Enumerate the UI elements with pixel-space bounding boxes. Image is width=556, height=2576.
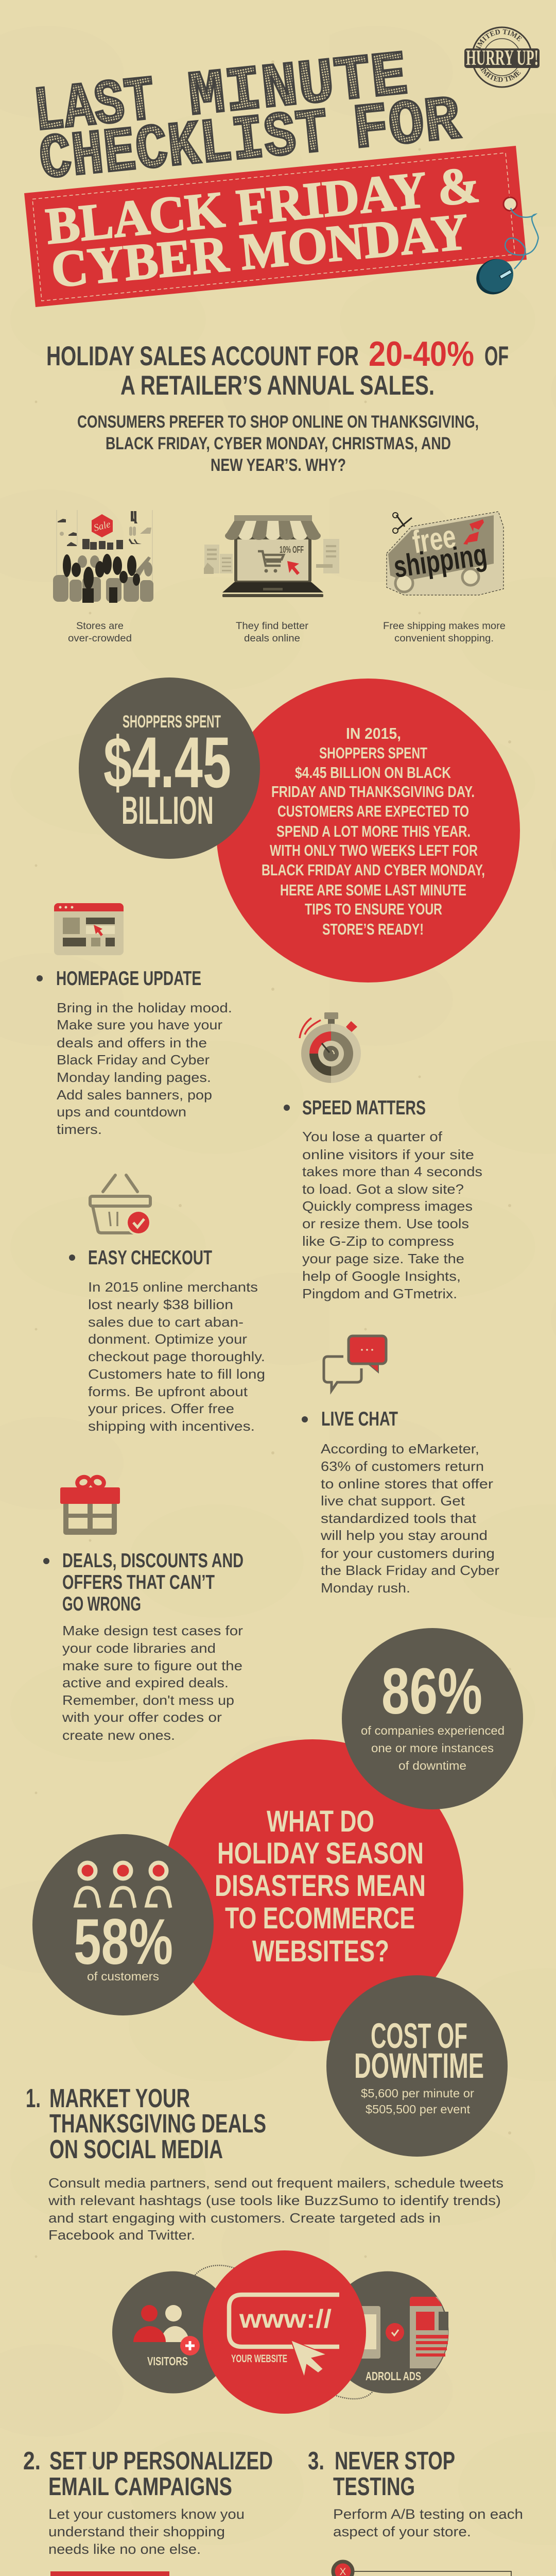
red circle: in 2015: $4.45 BILLION ON BLACK	[295, 764, 451, 782]
heading 2: set up personalized email campaigns	[23, 2447, 273, 2501]
heading 2: set up personalized email campaigns: 2.	[23, 2447, 41, 2475]
captions: why shop online	[68, 621, 506, 644]
red circle: holiday season disasters: TO ECOMMERCE	[225, 1902, 415, 1935]
section: speed matters: to load. Got a slow site?	[302, 1181, 464, 1197]
icon: gift	[60, 1475, 120, 1535]
icon: online store on laptop: 10% OFF	[280, 545, 304, 555]
stamp: hurry up: LIMITED TIME	[480, 68, 521, 82]
section: live chat: standardized tools that	[321, 1511, 477, 1526]
section: speed matters: your page size. Take the	[302, 1251, 464, 1266]
section: speed matters: SPEED MATTERS	[302, 1097, 426, 1119]
heading 3: never stop testing: TESTING	[333, 2473, 415, 2501]
headline: holiday sales: 20-40%	[369, 334, 474, 374]
text: consult media partners: Consult media partners, send out frequent mailers, schedule tweets	[48, 2175, 503, 2191]
section: homepage update: Black Friday and Cyber	[57, 1052, 210, 1067]
section: speed matters: Quickly compress images	[302, 1198, 473, 1214]
stat circle: 86%: one or more instances	[371, 1741, 494, 1755]
section: live chat: LIVE CHAT	[321, 1408, 398, 1430]
icon: chat bubbles	[324, 1336, 386, 1391]
section: live chat: the Black Friday and Cyber	[321, 1563, 499, 1578]
section: easy checkout: checkout page thoroughly.	[88, 1349, 265, 1364]
red circle: holiday season disasters: WHAT DO	[267, 1805, 374, 1838]
circle: visitors	[112, 2271, 234, 2394]
stat circle: cost of downtime: COST OF	[371, 2016, 467, 2056]
icon: crowded store: Sale	[93, 519, 112, 534]
section: easy checkout: In 2015 online merchants	[88, 1279, 258, 1295]
icon: free shipping coupon	[387, 512, 503, 595]
red circle: in 2015: TIPS TO ENSURE YOUR	[305, 900, 442, 918]
section: homepage update: HOMEPAGE UPDATE	[56, 968, 201, 990]
grey circle: shoppers spent: SHOPPERS SPENT	[123, 712, 221, 732]
stat circle: 58%	[32, 1834, 214, 2015]
red circle: holiday season disasters: DISASTERS MEAN	[215, 1869, 426, 1903]
title: CHECKLIST	[36, 98, 332, 197]
section: easy checkout: lost nearly $38 billion	[88, 1297, 233, 1312]
section: live chat: 63% of customers return	[321, 1459, 484, 1474]
text: consult media partners: with relevant hashtags (use tools like BuzzSumo to identify trends)	[48, 2193, 501, 2208]
heading 3: never stop testing: 3.	[308, 2447, 324, 2475]
section: easy checkout: EASY CHECKOUT	[88, 1247, 212, 1269]
subheading: consumers prefer: NEW YEAR’S. WHY?	[211, 455, 346, 475]
section: homepage update: Monday landing pages.	[57, 1070, 211, 1085]
section: live chat: live chat support. Get	[321, 1493, 465, 1509]
section: easy checkout: forms. Be upfront about	[88, 1384, 248, 1399]
section: speed matters: like G-Zip to compress	[302, 1233, 454, 1249]
captions: why shop online: convenient shopping.	[394, 633, 494, 644]
captions: why shop online: deals online	[244, 633, 300, 644]
headline: holiday sales	[46, 334, 509, 401]
heading 3: never stop testing: NEVER STOP	[335, 2447, 455, 2475]
heading 2: set up personalized email campaigns: EMAIL CAMPAIGNS	[48, 2473, 232, 2501]
grey circle: shoppers spent	[79, 677, 260, 859]
arrow: adroll to website	[319, 2387, 372, 2399]
section: deals, discounts and offers: OFFERS THAT CAN’T	[62, 1571, 215, 1594]
circle: adroll ads: ADROLL ADS	[366, 2369, 421, 2383]
red circle: in 2015: WITH ONLY TWO WEEKS LEFT FOR	[270, 841, 478, 859]
circle: adroll ads	[326, 2271, 449, 2394]
heading 1: market your thanksgiving deals: THANKSGIVING DEALS	[49, 2109, 266, 2138]
section: homepage update	[37, 968, 232, 1137]
price tag banner	[24, 146, 538, 307]
section: homepage update: timers.	[57, 1122, 102, 1137]
section: homepage update: ups and countdown	[57, 1104, 186, 1120]
subheading: consumers prefer	[77, 412, 479, 475]
red circle: in 2015: SHOPPERS SPENT	[319, 744, 427, 762]
section: deals, discounts and offers: active and expired deals.	[62, 1675, 229, 1690]
headline: holiday sales: A RETAILER’S ANNUAL SALES.	[120, 370, 435, 401]
section: homepage update: Add sales banners, pop	[57, 1087, 212, 1103]
icon: checkout basket	[90, 1175, 151, 1235]
red circle: in 2015: BLACK FRIDAY AND CYBER MONDAY,	[262, 861, 485, 879]
title: FOR	[350, 85, 464, 166]
icon: free shipping coupon: shipping	[391, 537, 489, 584]
title: LAST	[30, 65, 159, 149]
stat circle: cost of downtime	[326, 1975, 508, 2157]
red circle: holiday season disasters	[162, 1739, 463, 2041]
stamp: hurry up: LIMITED TIME	[476, 29, 522, 48]
section: live chat: According to eMarketer,	[321, 1441, 479, 1456]
red circle: in 2015: HERE ARE SOME LAST MINUTE	[280, 881, 466, 899]
captions: why shop online: They find better	[236, 621, 309, 632]
title	[30, 40, 464, 197]
stat circle: 86%: of downtime	[398, 1759, 466, 1772]
section: easy checkout	[69, 1247, 265, 1434]
illustration: email in envelope	[48, 2571, 171, 2576]
section: speed matters: help of Google Insights,	[302, 1268, 461, 1284]
section: live chat: will help you stay around	[320, 1528, 488, 1543]
icon: stopwatch	[300, 1012, 361, 1083]
section: live chat: for your customers during	[321, 1546, 495, 1561]
text: consult media partners: and start engaging with customers. Create targeted ads in	[48, 2210, 441, 2226]
text: let your customers know	[48, 2506, 245, 2557]
section: easy checkout: Customers hate to fill long	[88, 1366, 265, 1382]
price tag banner: BLACK FRIDAY &	[43, 156, 482, 255]
stat circle: 86%: 86%	[381, 1655, 482, 1727]
icon: online store on laptop	[204, 515, 339, 597]
section: deals, discounts and offers: DEALS, DISCOUNTS AND	[62, 1550, 244, 1572]
stat circle: cost of downtime: $505,500 per event	[366, 2103, 471, 2116]
text: perform a/b testing: aspect of your store.	[333, 2524, 471, 2539]
section: deals, discounts and offers: with your offer codes or	[62, 1709, 222, 1725]
stat circle: 58%: of customers	[87, 1970, 159, 1983]
red circle: in 2015: STORE’S READY!	[322, 920, 424, 938]
text: perform a/b testing	[333, 2506, 523, 2539]
section: homepage update: deals and offers in the	[57, 1035, 207, 1050]
price tag banner: CYBER MONDAY	[49, 202, 471, 298]
icon: three customers	[76, 1863, 170, 1908]
red circle: in 2015: CUSTOMERS ARE EXPECTED TO	[277, 802, 469, 820]
section: deals, discounts and offers: GO WRONG	[62, 1593, 141, 1615]
section: deals, discounts and offers: make sure to figure out the	[62, 1658, 242, 1673]
section: deals, discounts and offers: your code libraries and	[62, 1640, 216, 1656]
illustration: promo code coupon	[333, 2562, 511, 2576]
grey circle: shoppers spent: $4.45	[103, 722, 231, 803]
section: deals, discounts and offers	[43, 1550, 244, 1743]
heading 1: market your thanksgiving deals: ON SOCIAL MEDIA	[49, 2134, 223, 2164]
stat circle: 86%	[342, 1628, 523, 1809]
section: homepage update: Bring in the holiday mood.	[57, 1000, 232, 1015]
subheading: consumers prefer: BLACK FRIDAY, CYBER MONDAY, CHRISTMAS, AND	[106, 434, 451, 453]
section: speed matters: takes more than 4 seconds	[302, 1164, 482, 1179]
captions: why shop online: over-crowded	[68, 633, 132, 644]
section: speed matters: You lose a quarter of	[302, 1129, 443, 1144]
heading 2: set up personalized email campaigns: SET UP PERSONALIZED	[49, 2447, 273, 2475]
heading 3: never stop testing	[308, 2447, 455, 2501]
section: deals, discounts and offers: create new ones.	[62, 1727, 175, 1743]
text: consult media partners: Facebook and Twitter.	[48, 2227, 195, 2243]
red circle: in 2015: FRIDAY AND THANKSGIVING DAY.	[271, 783, 475, 801]
stat circle: 58%: 58%	[74, 1906, 173, 1978]
text: let your customers know: Let your customers know you	[48, 2506, 245, 2522]
red circle: in 2015	[216, 679, 520, 982]
text: let your customers know: needs like no one else.	[48, 2541, 201, 2557]
captions: why shop online: Free shipping makes more	[383, 621, 506, 632]
circle: your website: YOUR WEBSITE	[231, 2353, 287, 2365]
red circle: in 2015: IN 2015,	[346, 724, 401, 742]
heading 1: market your thanksgiving deals: MARKET YOUR	[49, 2083, 190, 2113]
icon: free shipping coupon: free	[410, 519, 458, 561]
headline: holiday sales: HOLIDAY SALES ACCOUNT FOR	[46, 341, 359, 371]
stamp: hurry up	[464, 27, 540, 88]
headline: holiday sales: OF	[484, 341, 509, 371]
captions: why shop online: Stores are	[76, 621, 124, 632]
section: speed matters: online visitors if your site	[302, 1147, 474, 1162]
title: MINUTE	[185, 40, 411, 133]
text: consult media partners	[48, 2175, 503, 2243]
section: easy checkout: sales due to cart aban-	[88, 1314, 244, 1330]
red circle: holiday season disasters: HOLIDAY SEASON	[217, 1837, 424, 1870]
heading 1: market your thanksgiving deals: 1.	[26, 2083, 41, 2113]
section: live chat: Monday rush.	[321, 1580, 410, 1596]
red circle: in 2015: SPEND A LOT MORE THIS YEAR.	[276, 822, 471, 840]
section: live chat	[302, 1408, 499, 1596]
circle: visitors: VISITORS	[147, 2354, 188, 2368]
diagram: visitors, your website, adroll ads	[112, 2250, 449, 2414]
section: easy checkout: your prices. Offer free	[88, 1401, 234, 1416]
text: let your customers know: understand their shopping	[48, 2524, 225, 2539]
icon: crowded store	[53, 510, 153, 603]
section: easy checkout: donment. Optimize your	[88, 1331, 247, 1347]
text: perform a/b testing: Perform A/B testing on each	[333, 2506, 523, 2522]
arrow: visitors to website	[195, 2265, 249, 2276]
section: speed matters	[284, 1097, 482, 1301]
section: homepage update: Make sure you have your	[57, 1017, 222, 1032]
icon: tag button	[470, 252, 520, 301]
red circle: holiday season disasters: WEBSITES?	[252, 1935, 389, 1968]
stat circle: 86%: of companies experienced	[361, 1724, 505, 1737]
section: speed matters: Pingdom and GTmetrix.	[302, 1286, 457, 1301]
section: deals, discounts and offers: Make design test cases for	[62, 1623, 243, 1638]
section: speed matters: or resize them. Use tools	[302, 1216, 469, 1231]
section: live chat: to online stores that offer	[321, 1476, 493, 1492]
circle: your website	[203, 2250, 366, 2414]
circle: your website: www://	[239, 2304, 332, 2333]
stat circle: cost of downtime: $5,600 per minute or	[361, 2087, 474, 2100]
section: easy checkout: shipping with incentives.	[88, 1418, 255, 1434]
heading 1: market your thanksgiving deals	[26, 2083, 266, 2164]
stat circle: cost of downtime: DOWNTIME	[354, 2046, 484, 2086]
icon: homepage window	[54, 903, 124, 955]
section: deals, discounts and offers: Remember, don't mess up	[62, 1692, 234, 1708]
grey circle: shoppers spent: BILLION	[121, 789, 214, 833]
